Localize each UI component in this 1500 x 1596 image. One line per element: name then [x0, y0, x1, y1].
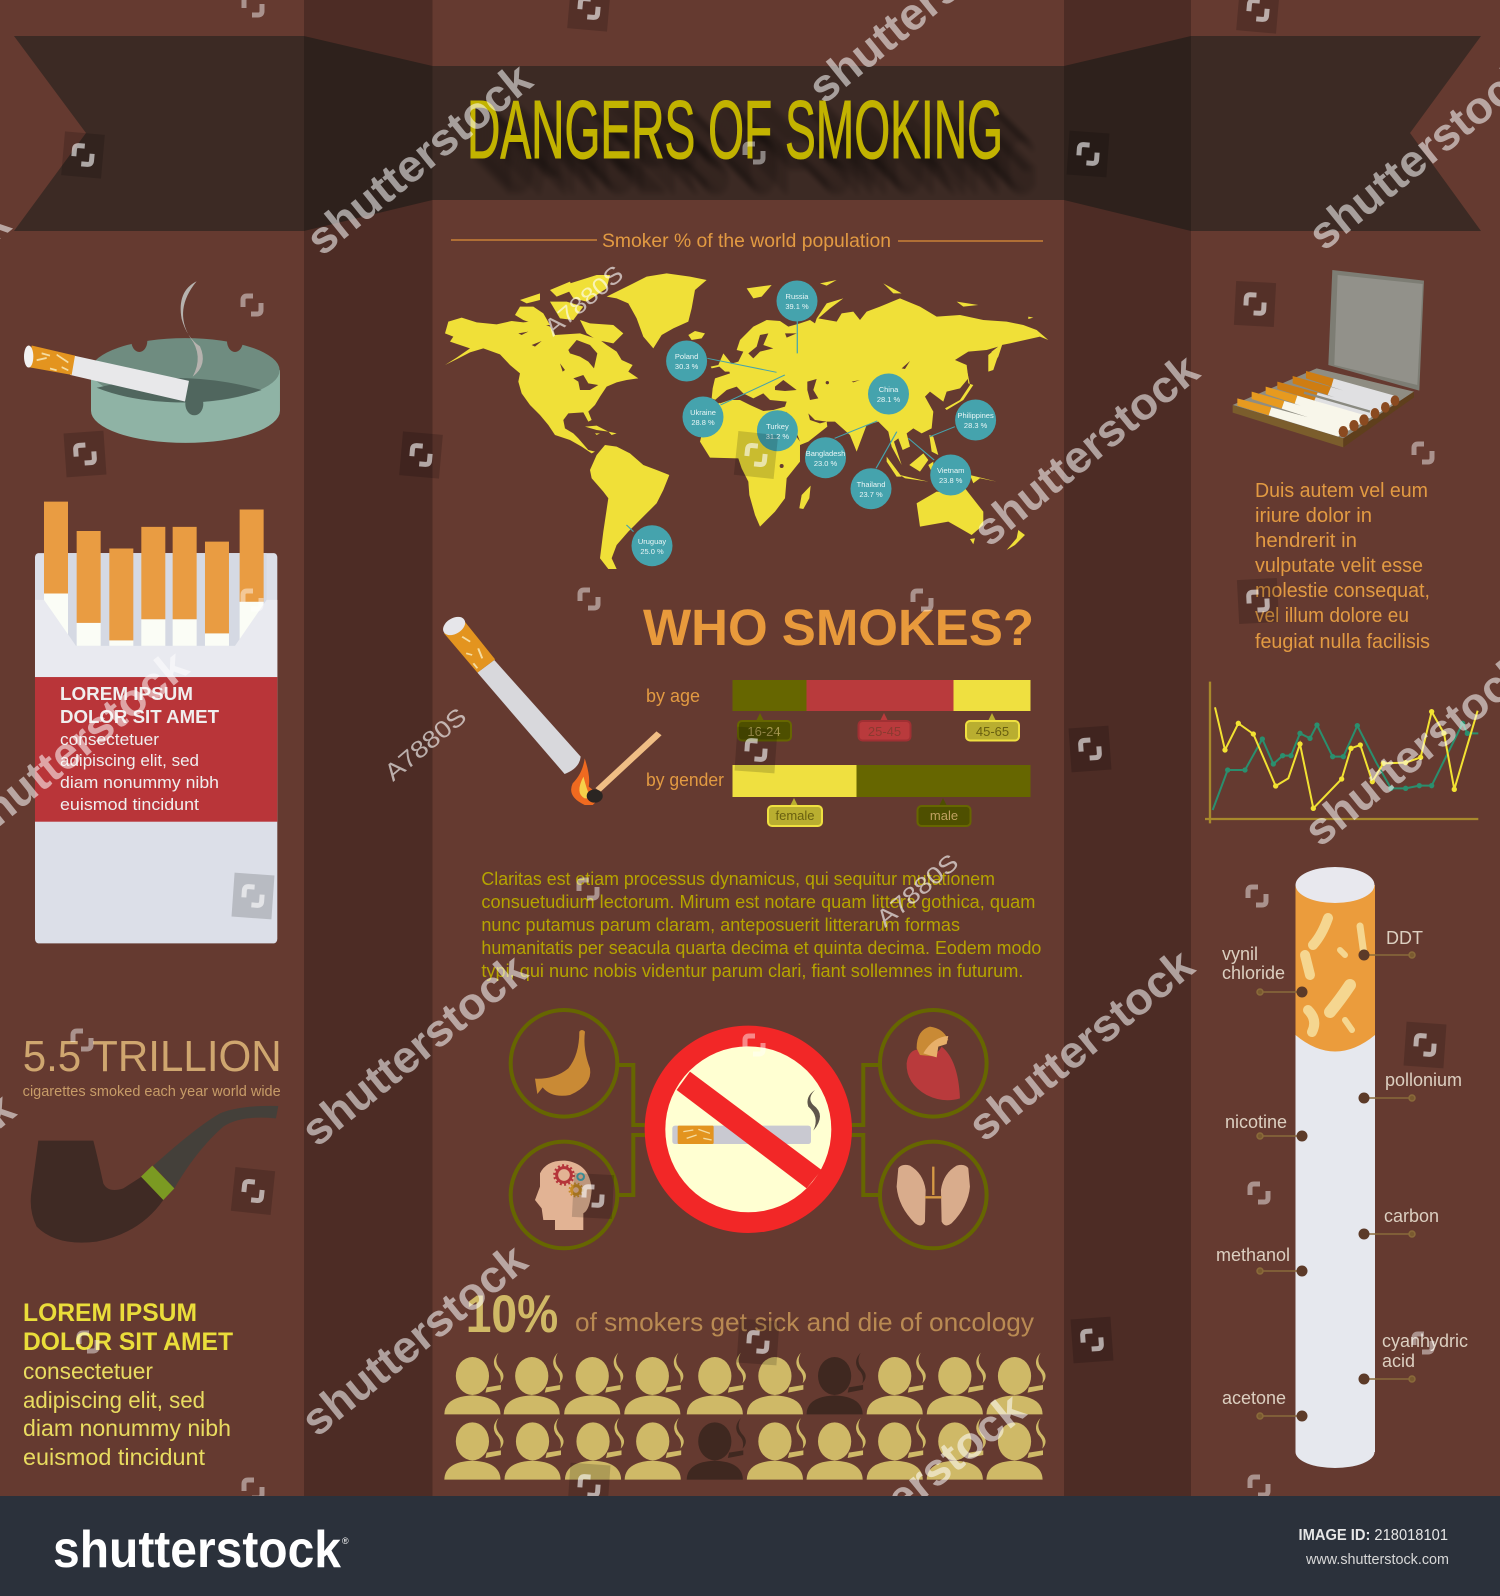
text block: bottom left: diam nonummy nibh [23, 1415, 231, 1441]
tag: 16-24: 16-24 [747, 724, 781, 739]
chart: by age [646, 680, 1030, 740]
map marker: Poland [666, 340, 707, 382]
ingredient label: pollonium: pollonium [1385, 1070, 1462, 1090]
watermark text: shutterstock [789, 1382, 1035, 1595]
statistic: 5.5 trillion [23, 1032, 282, 1100]
icon: cigarette pack [35, 502, 277, 943]
watermark text: shutterstock [291, 943, 537, 1156]
text block: right column: hendrerit in [1255, 530, 1357, 552]
ingredient label: acetone: acetone [1222, 1388, 1286, 1408]
statistic: 5.5 trillion: cigarettes smoked each year world wide [23, 1084, 281, 1100]
statistic: 10 percent: 10% [466, 1285, 558, 1344]
text block: right column: vel illum dolore eu [1255, 605, 1409, 627]
watermark text: A7880S [540, 260, 629, 342]
map marker: China: China [879, 385, 899, 394]
ingredient connectors [1257, 952, 1415, 1419]
icon: large cigarette with ingredients [1257, 867, 1415, 1468]
pack label text: diam nonummy nibh [60, 773, 219, 792]
map marker: Russia: 39.1 % [785, 302, 809, 311]
pack label text: DOLOR SIT AMET [60, 706, 220, 727]
text block: paragraph: humanitatis per seacula quarta decima et quinta decima. Eodem modo [481, 938, 1041, 958]
ingredient label: cyanhydric acid [1382, 1331, 1468, 1371]
heading: who smokes: WHO SMOKES? [643, 599, 1034, 656]
ingredient label: vynil chloride: vynil [1222, 944, 1258, 964]
watermark text: A7880S [872, 849, 964, 933]
watermark text: shutterstock [291, 1233, 537, 1446]
registered mark: ® [342, 1536, 349, 1546]
tag: 25-45 [858, 713, 910, 740]
watermark text: shutterstock [963, 343, 1209, 556]
statistic: 10 percent [466, 1285, 1034, 1344]
map marker: Poland: 30.3 % [675, 362, 699, 371]
icon: no smoking sign [645, 1026, 852, 1233]
text block: paragraph: consuetudium lectorum. Mirum est notare quam littera gothica, quam [481, 892, 1035, 912]
icon: heart [880, 1010, 987, 1117]
ingredient label: carbon: carbon [1384, 1206, 1439, 1226]
ingredient label: vynil chloride: chloride [1222, 963, 1285, 983]
map marker: China: 28.1 % [877, 395, 901, 404]
text block: right column: iriure dolor in [1255, 505, 1372, 527]
map marker: China [868, 374, 909, 414]
title ribbon [14, 36, 1481, 231]
watermark text: shutterstock [958, 938, 1204, 1151]
connector lines [626, 320, 955, 532]
map marker: Philippines [955, 400, 996, 440]
watermark text: shutterstock [296, 52, 542, 265]
icon: stomach [511, 1010, 617, 1117]
map marker: Uruguay: Uruguay [638, 537, 666, 546]
map marker: Russia: Russia [786, 292, 809, 301]
text block: bottom left [23, 1299, 233, 1470]
text block: bottom left: consectetuer [23, 1358, 153, 1384]
text block: bottom left: euismod tincidunt [23, 1444, 206, 1470]
statistic: 10 percent: of smokers get sick and die of oncology [575, 1307, 1034, 1337]
map marker: Uruguay [632, 525, 672, 566]
tag: 16-24 [738, 713, 791, 740]
tag: male [918, 798, 970, 826]
text block: right column: vulputate velit esse [1255, 555, 1423, 577]
icon: head with gears [511, 1142, 617, 1248]
text block: paragraph: Claritas est etiam processus dynamicus, qui sequitur mutationem [481, 869, 995, 889]
world map [445, 273, 1048, 569]
health effects diagram [511, 1010, 987, 1248]
pictogram: smokers row 1 [444, 1353, 1046, 1414]
tag: 45-65: 45-65 [976, 724, 1009, 739]
map marker: Uruguay: 25.0 % [640, 547, 664, 556]
eurasia, africa and oceania [700, 280, 1048, 550]
ingredient label: cyanhydric acid: acid [1382, 1351, 1415, 1371]
ingredient label: nicotine: nicotine [1225, 1112, 1287, 1132]
image id: IMAGE ID: 218018101 [1298, 1527, 1448, 1544]
website: www.shutterstock.com [1305, 1552, 1449, 1568]
icon: cigarette lit by match [439, 613, 659, 805]
ingredient label: vynil chloride [1222, 944, 1285, 983]
ingredient label: DDT: DDT [1386, 928, 1423, 948]
map marker: Vietnam: 23.8 % [939, 476, 963, 485]
map marker: Vietnam [930, 454, 971, 496]
map marker: Thailand [850, 468, 892, 509]
pack label text: LOREM IPSUM [60, 683, 193, 704]
map marker: Ukraine [682, 396, 724, 438]
statistic: 5.5 trillion: 5.5 TRILLION [23, 1032, 282, 1081]
text block: right column [1255, 480, 1430, 653]
map marker: Bangladesh [805, 437, 846, 478]
map marker: Turkey [757, 410, 798, 451]
map marker: Philippines: 28.3 % [964, 421, 988, 430]
text block: right column: Duis autem vel eum [1255, 480, 1428, 502]
text block: bottom left: LOREM IPSUM [23, 1299, 197, 1327]
chart: by gender [646, 765, 1030, 826]
footer logo: shutterstock [53, 1521, 341, 1579]
map marker: Thailand: 23.7 % [859, 490, 883, 499]
tag: female: female [775, 808, 815, 823]
map marker: Turkey: 31.2 % [766, 432, 789, 441]
map marker: Bangladesh: 23.0 % [814, 459, 838, 468]
tag: 25-45: 25-45 [868, 724, 901, 739]
icon: lungs [880, 1142, 987, 1248]
pack label text: euismod tincidunt [60, 795, 199, 814]
map heading: Smoker % of the world population [602, 230, 891, 252]
map marker: Ukraine: Ukraine [690, 408, 716, 417]
tag: male: male [930, 808, 958, 823]
text block: bottom left: adipiscing elit, sed [23, 1387, 205, 1413]
pack label text: consectetuer [60, 730, 159, 749]
footer bar [0, 1496, 1500, 1596]
map marker: Poland: Poland [675, 352, 698, 361]
map marker: Vietnam: Vietnam [937, 466, 964, 475]
icon: pipe [31, 1106, 278, 1243]
pictogram: smokers row 2 [444, 1418, 1046, 1480]
icon: ashtray with cigarette [24, 281, 280, 443]
map marker: Philippines: Philippines [957, 411, 994, 420]
map marker: Thailand: Thailand [857, 480, 885, 489]
watermark text: A7880S [380, 703, 472, 787]
map marker: Ukraine: 28.8 % [691, 418, 715, 427]
title: DANGERS OF SMOKING [467, 83, 1003, 176]
tag: 45-65 [966, 713, 1019, 740]
tag: female [768, 798, 822, 826]
text block: paragraph [481, 869, 1041, 981]
map marker: Russia [776, 280, 818, 322]
chart: by age: by age [646, 686, 700, 706]
ingredient label: methanol: methanol [1216, 1245, 1290, 1265]
text block: right column: feugiat nulla facilisis [1255, 631, 1430, 653]
text block: paragraph: nunc putamus parum claram, anteposuerit litterarum formas [481, 915, 960, 935]
ingredient label: cyanhydric acid: cyanhydric [1382, 1331, 1468, 1351]
text block: paragraph: typi, qui nunc nobis videntur parum clari, fiant sollemnes in futurum. [481, 961, 1023, 981]
americas and greenland [445, 273, 707, 569]
text block: right column: molestie consequat, [1255, 580, 1430, 602]
map marker: Bangladesh: Bangladesh [806, 449, 845, 458]
pack label text: adipiscing elit, sed [60, 751, 199, 770]
text block: bottom left: DOLOR SIT AMET [23, 1328, 233, 1356]
icon: open cigarette case [1233, 270, 1424, 447]
map marker: Turkey: Turkey [766, 422, 789, 431]
chart: line graph [1205, 682, 1478, 823]
chart: by gender: by gender [646, 770, 724, 790]
pack label text [60, 683, 220, 814]
